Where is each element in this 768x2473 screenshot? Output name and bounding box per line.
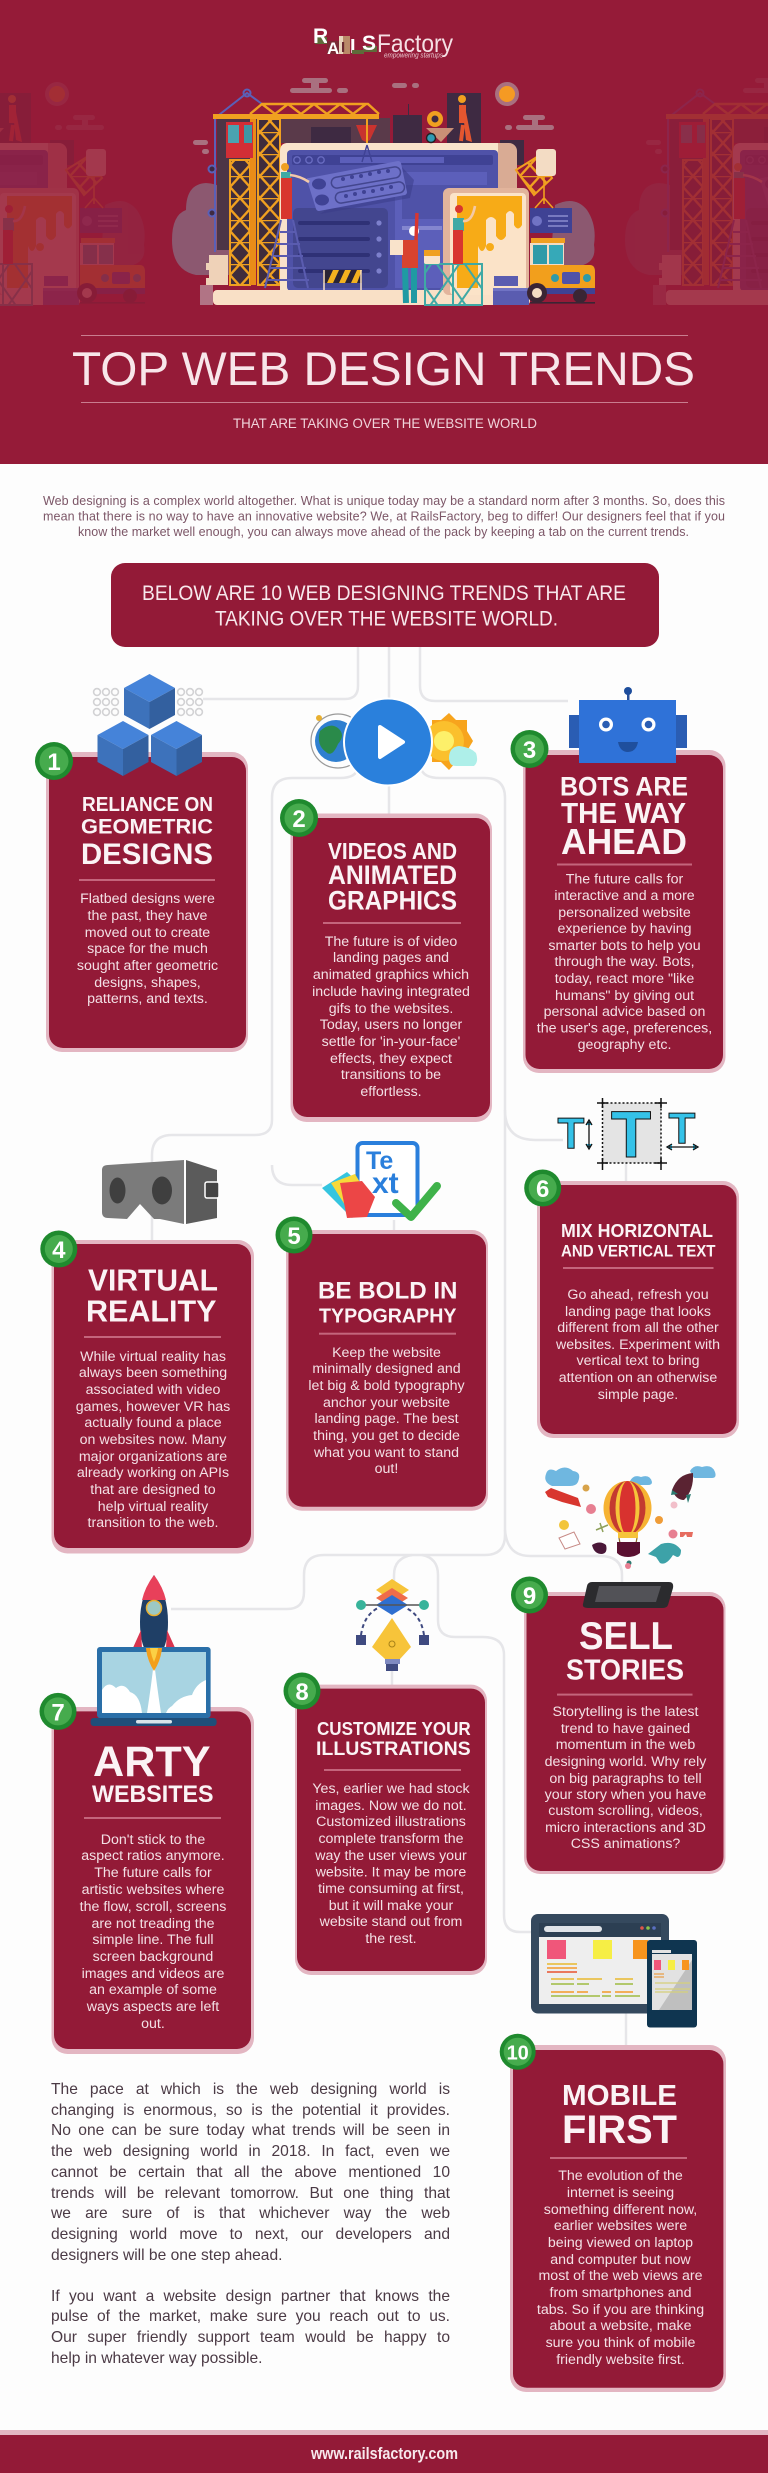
heading [318, 1278, 458, 1328]
body text: from smartphones and [550, 2285, 691, 2301]
body text: The future is of video [325, 934, 457, 950]
scaffold and paint cans [424, 250, 529, 305]
logo: empowering startups [384, 50, 443, 60]
intro text [43, 494, 725, 539]
badge 5 [276, 1216, 312, 1254]
body text: Flatbed designs were [80, 891, 215, 907]
body text: attention on an otherwise [559, 1370, 717, 1386]
body text: simple line. The full [92, 1932, 214, 1948]
intro text: know the market well enough, you can always move ahead of the pack by keeping a tab on the current trends. [78, 525, 689, 539]
logo: A [327, 39, 339, 58]
body text: sure you think of mobile [546, 2335, 696, 2351]
badge 6: 6 [536, 1176, 549, 1203]
body text: way the user views your [314, 1848, 467, 1864]
panel: trend 3 bots are the way ahead [510, 687, 726, 1073]
logo: Factory [377, 30, 453, 58]
heading [81, 794, 213, 871]
body text: friendly website first. [556, 2352, 685, 2368]
heading [562, 2080, 677, 2152]
logo: L [350, 36, 362, 58]
panel: trend 10 mobile first [500, 1914, 726, 2392]
title: TOP WEB DESIGN TRENDS [72, 342, 695, 395]
body text: today, react more "like [555, 971, 694, 987]
closing paragraph 1: the web designing world in 2018. In fact, even we [51, 2143, 450, 2160]
body text: Customized illustrations [316, 1814, 466, 1830]
body text: earlier websites were [554, 2218, 687, 2234]
body text: out! [375, 1461, 398, 1477]
badge 8 [284, 1672, 320, 1710]
body text: The future calls for [94, 1865, 212, 1881]
dark buildings [393, 93, 524, 165]
heading: TYPOGRAPHY [319, 1305, 457, 1328]
truck [527, 238, 595, 304]
body text: The future calls for [566, 872, 684, 888]
body text: aspect ratios anymore. [81, 1848, 225, 1864]
workers [265, 95, 475, 303]
body text: moved out to create [85, 925, 210, 941]
icon: pen tool with layers [356, 1579, 429, 1671]
body text: always been something [79, 1365, 227, 1381]
closing paragraph 1 [51, 2081, 450, 2264]
base plate and blocks [200, 255, 530, 305]
closing paragraph 1: The pace at which is the web designing world is [51, 2081, 450, 2098]
body text: the rest. [365, 1931, 417, 1947]
heading [561, 1220, 716, 1261]
body text: images. Now we do not. [315, 1798, 467, 1814]
connector lines [152, 647, 626, 2048]
body text: screen background [93, 1949, 213, 1965]
closing paragraph 1: cannot be certain that all the above mentioned 10 [51, 2164, 450, 2181]
logo: R [313, 25, 328, 48]
panel: trend 4 virtual reality [40, 1160, 254, 1554]
heading: BE BOLD IN [318, 1278, 458, 1304]
badge 4: 4 [52, 1237, 66, 1264]
heading: VIDEOS AND [328, 838, 457, 864]
body text [77, 891, 218, 1007]
heading: GRAPHICS [328, 886, 457, 916]
heading: VIRTUAL [88, 1263, 218, 1298]
badge 1: 1 [47, 749, 61, 776]
heading [560, 772, 688, 862]
clouds [193, 78, 554, 154]
body text: website stand out from [319, 1914, 462, 1930]
body text: help virtual reality [98, 1499, 209, 1515]
body text: effects, they expect [330, 1051, 452, 1067]
heading [86, 1263, 218, 1329]
icon: monitor and phone [531, 1914, 697, 2028]
heading [92, 1738, 214, 1808]
body text: trend to have gained [561, 1721, 690, 1737]
body text: humans" by giving out [555, 988, 694, 1004]
body text: the past, they have [88, 908, 208, 924]
panel: trend 2 videos and animated graphics [280, 698, 492, 1122]
panel: trend 1 reliance on geometric designs [35, 674, 248, 1052]
body text: Today, users no longer [320, 1017, 463, 1033]
illustration: construction site building a website [172, 78, 595, 305]
body text: time consuming at first, [318, 1881, 464, 1897]
heading: STORIES [566, 1655, 684, 1687]
body text: images and videos are [82, 1966, 224, 1982]
badge 2 [280, 799, 318, 837]
closing paragraph 1: trends will be relevant tomorrow. But one thing that [51, 2185, 450, 2202]
body text: micro interactions and 3D [545, 1820, 706, 1836]
banner: TAKING OVER THE WEBSITE WORLD. [215, 606, 558, 630]
icon: cubes [94, 674, 202, 776]
crane [208, 90, 390, 285]
body text [555, 1287, 720, 1403]
body text [537, 872, 712, 1053]
body text: settle for 'in-your-face' [322, 1034, 460, 1050]
closing paragraph 2: help in whatever way possible. [51, 2350, 262, 2367]
heading: SELL [579, 1615, 673, 1658]
icon: text document with check: Te [366, 1147, 393, 1175]
badge 10: 10 [507, 2042, 529, 2064]
body text: custom scrolling, videos, [548, 1803, 703, 1819]
body text: through the way. Bots, [554, 954, 695, 970]
body text: actually found a place [84, 1415, 222, 1431]
heading: MIX HORIZONTAL [561, 1220, 713, 1241]
icon: text document with check: xt [372, 1167, 399, 1200]
badge 7 [40, 1693, 76, 1730]
closing paragraph 1: we are sure of is that whichever way the web [51, 2205, 450, 2222]
body text: interactive and a more [554, 888, 695, 904]
panel: trend 8 customize your illustrations [284, 1579, 487, 1975]
icon: VR headset [102, 1160, 219, 1224]
body text: While virtual reality has [80, 1349, 226, 1365]
body text: being viewed on laptop [548, 2235, 693, 2251]
closing paragraph 1: No one can be sure today what trends will be seen in [51, 2122, 450, 2139]
body text: Yes, earlier we had stock [312, 1781, 471, 1797]
body text: momentum in the web [556, 1737, 695, 1753]
icon: typography T marks: T [669, 1104, 696, 1153]
icon: rocket launching from laptop [91, 1575, 217, 1726]
body text [545, 1704, 707, 1852]
logo [313, 25, 453, 60]
badge 9: 9 [523, 1583, 536, 1610]
header background [0, 0, 768, 464]
body text: designs, shapes, [94, 975, 201, 991]
logo: I [341, 39, 345, 56]
body text: personalized website [558, 905, 691, 921]
body text: gifs to the websites. [329, 1001, 453, 1017]
body text: associated with video [86, 1382, 221, 1398]
body text: Keep the website [332, 1345, 441, 1361]
panel: trend 9 sell stories [511, 1466, 726, 1874]
badge 1 [35, 742, 73, 780]
body text: an example of some [89, 1982, 217, 1998]
icon: play button with earth and sun [311, 698, 477, 786]
badge 3: 3 [523, 737, 536, 764]
heading: AND VERTICAL TEXT [561, 1243, 716, 1261]
body text: what you want to stand [313, 1445, 459, 1461]
right crane and board [516, 149, 572, 233]
body text: minimally designed and [312, 1361, 461, 1377]
faded illustration copy, left [0, 78, 145, 305]
heading: DESIGNS [81, 838, 213, 871]
body text: games, however VR has [76, 1399, 230, 1415]
heading: THE WAY [561, 798, 686, 830]
closing paragraph 1: changing is enormous, so is the potential it provides. [51, 2102, 450, 2119]
body text: landing pages and [333, 950, 449, 966]
body text: effortless. [360, 1084, 422, 1100]
banner [111, 563, 659, 647]
icon: typography T marks: T [611, 1097, 651, 1171]
body text: the user's age, preferences, [537, 1020, 712, 1036]
subtitle: THAT ARE TAKING OVER THE WEBSITE WORLD [233, 415, 537, 431]
body text: designing world. Why rely [545, 1754, 707, 1770]
body text: Go ahead, refresh you [567, 1287, 709, 1303]
trees [172, 183, 595, 275]
footer [0, 2430, 768, 2473]
closing paragraph 1: designing world move to next, our developers and [51, 2226, 450, 2243]
body text: different from all the other [557, 1320, 719, 1336]
heading: FIRST [562, 2108, 677, 2152]
body text: let big & bold typography [308, 1378, 465, 1394]
body text: patterns, and texts. [87, 991, 208, 1007]
body text [80, 1832, 226, 2032]
icon: balloon with story objects [545, 1466, 716, 1569]
body text: space for the much [87, 941, 208, 957]
body text: anchor your website [323, 1395, 450, 1411]
body text: landing page that looks [565, 1304, 711, 1320]
body text: Storytelling is the latest [553, 1704, 698, 1720]
body text [312, 934, 470, 1100]
badge 10 [500, 2034, 536, 2070]
small tablet being painted [443, 188, 529, 295]
body text: but it will make your [329, 1898, 454, 1914]
body text [308, 1345, 465, 1477]
body text: thing, you get to decide [313, 1428, 460, 1444]
closing paragraph 2: Our super friendly support team would be happy to [51, 2329, 450, 2346]
badge 9 [511, 1576, 548, 1614]
body text: your story when you have [545, 1787, 706, 1803]
body text: are not treading the [91, 1916, 215, 1932]
heading [328, 838, 457, 916]
faded illustration copy, right [625, 78, 768, 305]
heading: ILLUSTRATIONS [316, 1739, 471, 1760]
body text: transition to the web. [88, 1515, 218, 1531]
heading: RELIANCE ON [82, 794, 213, 816]
body text: about a website, make [550, 2318, 692, 2334]
body text: website. It may be more [315, 1864, 466, 1880]
body text: animated graphics which [313, 967, 469, 983]
closing paragraph 2: If you want a website design partner that knows the [51, 2288, 450, 2304]
body text: Don't stick to the [101, 1832, 205, 1848]
heading: MOBILE [562, 2080, 677, 2112]
body text: out. [141, 2016, 165, 2032]
badge 2: 2 [292, 806, 306, 833]
panel: trend 5 be bold in typography [276, 1143, 488, 1511]
body text: most of the web views are [538, 2268, 703, 2284]
tablet on site: main screen [280, 143, 517, 295]
heading: WEBSITES [92, 1781, 214, 1808]
body text: geography etc. [578, 1037, 671, 1053]
body text [537, 2168, 704, 2368]
icon: smartphone [583, 1582, 673, 1608]
heading: BOTS ARE [560, 772, 688, 802]
badge 5: 5 [287, 1223, 301, 1250]
sun [495, 82, 519, 106]
icon: text document with check [322, 1143, 437, 1218]
body text [312, 1781, 471, 1947]
heading: GEOMETRIC [81, 816, 213, 838]
body text: include having integrated [312, 984, 470, 1000]
body text: already working on APIs [77, 1465, 229, 1481]
heading [316, 1719, 471, 1760]
heading: CUSTOMIZE YOUR [317, 1719, 471, 1739]
panel: trend 7 arty websites [40, 1575, 254, 2054]
body text: on big paragraphs to tell [549, 1771, 702, 1787]
body text: complete transform the [318, 1831, 464, 1847]
title block [72, 335, 695, 431]
body text: major organizations are [79, 1449, 227, 1465]
body text: and computer but now [550, 2252, 691, 2268]
closing paragraph 2 [51, 2288, 450, 2367]
closing paragraph 1: designers will be one step ahead. [51, 2247, 282, 2264]
body text [76, 1349, 230, 1531]
heading [566, 1615, 684, 1687]
intro text: mean that there is no way to have an innovative website? We, at RailsFactory, beg to differ! Our designers feel that if you [43, 510, 725, 524]
body text: the flow, scroll, screens [80, 1899, 226, 1915]
intro text: Web designing is a complex world altogether. What is unique today may be a standard norm after 3 months. So, does this [43, 494, 725, 508]
icon: typography T marks [558, 1097, 698, 1171]
body text: something different now, [544, 2202, 697, 2218]
icon: typography T marks: T [558, 1109, 585, 1158]
body text: experience by having [557, 921, 692, 937]
body text: artistic websites where [82, 1882, 224, 1898]
body text: transitions to be [341, 1067, 441, 1083]
badge 3 [510, 730, 548, 768]
body text: websites. Experiment with [555, 1337, 720, 1353]
body text: CSS animations? [571, 1836, 680, 1852]
body text: tabs. So if you are thinking [537, 2302, 704, 2318]
body text: vertical text to bring [576, 1353, 700, 1369]
body text: that are designed to [90, 1482, 216, 1498]
body text: on websites now. Many [80, 1432, 227, 1448]
heading: ARTY [93, 1738, 211, 1786]
panel: trend 6 mix horizontal and vertical text [524, 1097, 739, 1438]
heading: REALITY [86, 1294, 217, 1329]
body text: sought after geometric [77, 958, 218, 974]
body text: personal advice based on [544, 1004, 705, 1020]
footer: www.railsfactory.com [310, 2444, 458, 2463]
badge 6 [524, 1170, 561, 1206]
banner: BELOW ARE 10 WEB DESIGNING TRENDS THAT ARE [142, 581, 626, 605]
body text: internet is seeing [567, 2185, 674, 2201]
heading: AHEAD [561, 821, 687, 862]
body text: landing page. The best [314, 1411, 459, 1427]
body text: smarter bots to help you [548, 938, 701, 954]
heading: ANIMATED [328, 860, 457, 890]
body text: ways aspects are left [86, 1999, 219, 2015]
logo: S [362, 32, 376, 55]
badge 7: 7 [51, 1699, 65, 1726]
body text: simple page. [598, 1387, 678, 1403]
badge 4 [40, 1230, 77, 1268]
icon: robot [569, 687, 687, 763]
closing paragraph 2: pulse of the market, make sure you reach out to us. [51, 2308, 450, 2325]
body text: The evolution of the [558, 2168, 683, 2184]
badge 8: 8 [295, 1679, 309, 1706]
